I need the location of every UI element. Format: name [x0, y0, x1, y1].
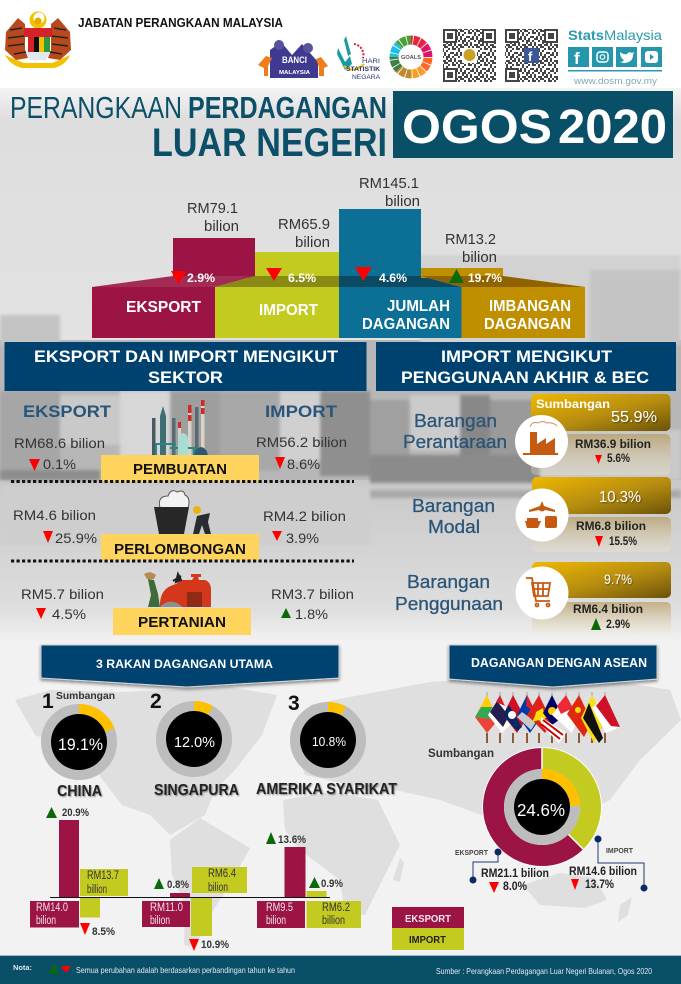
panel heading: PENGGUNAAN AKHIR & BEC: [401, 369, 649, 387]
callout: eksport: RM21.1 bilion: [481, 866, 549, 880]
donut chart: ASEAN share: [482, 747, 602, 867]
value: import pertanian: RM3.7 bilion: [271, 586, 354, 602]
header: department name: JABATAN PERANGKAAN MALAYSIA: [78, 15, 284, 30]
panel: 3 rakan dagangan utama: [30, 645, 464, 951]
donut chart: ASEAN share: 24.6%: [517, 800, 565, 820]
title: LUAR NEGERI: [152, 121, 387, 165]
value: eksport pertanian: 4.5%: [52, 606, 86, 622]
panel heading: [376, 342, 676, 391]
bars: Amerika Syarikat: 0.9%: [321, 878, 343, 890]
row: barangan perantaraan: RM36.9 bilion: [575, 437, 651, 451]
row: barangan penggunaan: Barangan: [407, 572, 490, 592]
row: barangan penggunaan: 2.9%: [606, 617, 630, 631]
title date box: [393, 91, 673, 158]
column: imbangan dagangan: IMBANGAN: [489, 298, 571, 315]
bars: Amerika Syarikat: 13.6%: [278, 834, 306, 846]
column: jumlah dagangan: [339, 176, 462, 338]
bars: China: bilion: [36, 915, 56, 927]
value: import pembuatan: 8.6%: [287, 456, 320, 472]
panel: import mengikut penggunaan akhir dan BEC: [376, 342, 676, 634]
row: barangan penggunaan: 9.7%: [604, 571, 632, 587]
QR code: Facebook: f: [528, 49, 533, 64]
legend: [392, 907, 464, 950]
icon: ASEAN flags: [475, 692, 620, 743]
logo: Banci Malaysia 2020: MALAYSIA: [279, 70, 310, 76]
icon: factory: [523, 422, 558, 455]
bars: Singapura: [142, 867, 247, 951]
bars: China: 20.9%: [62, 807, 89, 819]
bars: China: 8.5%: [92, 926, 115, 938]
StatsMalaysia social block: StatsMalaysia: [568, 27, 662, 43]
column: jumlah dagangan: bilion: [385, 194, 420, 210]
partner: China: [42, 690, 115, 800]
bar chart: eksport and import by partner: [30, 807, 361, 951]
panel: eksport dan import mengikut sektor: [4, 342, 366, 635]
logo: Banci Malaysia 2020: BANCI: [282, 55, 307, 65]
partner: Amerika Syarikat: [256, 692, 397, 798]
ribbon heading: [41, 645, 339, 687]
sector label: perlombongan: PERLOMBONGAN: [114, 542, 246, 558]
column: imbangan dagangan: [421, 232, 585, 338]
column: jumlah dagangan: JUMLAH: [387, 298, 450, 315]
row: barangan modal: Barangan: [412, 496, 495, 516]
bars: Singapura: bilion: [150, 915, 170, 927]
partner: China: 19.1%: [58, 736, 103, 754]
QR code: Facebook: [505, 29, 558, 82]
callout: import: [569, 836, 648, 892]
ribbon heading: [449, 645, 657, 687]
partner: Singapura: 12.0%: [174, 734, 215, 751]
bars: China: billion: [87, 884, 107, 896]
bars: Amerika Syarikat: bilion: [266, 915, 286, 927]
column: eksport: RM79.1: [187, 201, 238, 217]
title date box: 2020: [558, 101, 667, 154]
callout: import: RM14.6 bilion: [569, 864, 637, 878]
ribbon heading: DAGANGAN DENGAN ASEAN: [471, 656, 647, 670]
callout: import: 13.7%: [585, 877, 614, 891]
sector label: pertanian: PERTANIAN: [138, 615, 226, 631]
world map backdrop: [0, 640, 681, 956]
row: barangan penggunaan: Penggunaan: [395, 594, 503, 614]
value: import perlombongan: 3.9%: [286, 530, 319, 546]
bars: Singapura: 10.9%: [201, 939, 229, 951]
partner: Singapura: 2: [150, 690, 162, 713]
column: import: IMPORT: [259, 302, 319, 319]
panel heading: [4, 342, 366, 391]
sector label: pembuatan: [101, 455, 259, 482]
column: import: [215, 217, 339, 338]
StatsMalaysia social block: [568, 27, 662, 86]
title: PERANGKAAN: [10, 90, 182, 125]
title: [10, 90, 387, 165]
icon: plane, ship and truck: [525, 501, 557, 528]
logo: Sustainable Development Goals wheel: GOALS: [401, 55, 422, 61]
row: barangan modal: [412, 477, 671, 552]
QR code: website: [443, 29, 496, 82]
legend: IMPORT: [409, 934, 447, 946]
ribbon heading: 3 RAKAN DAGANGAN UTAMA: [96, 657, 273, 671]
bars: Amerika Syarikat: RM6.2: [322, 902, 350, 914]
column: jumlah dagangan: DAGANGAN: [362, 316, 450, 333]
column: imbangan dagangan: RM13.2: [445, 232, 496, 248]
StatsMalaysia social block: f: [574, 49, 580, 68]
bars: China: RM14.0: [36, 902, 68, 914]
value: eksport pembuatan: 0.1%: [43, 456, 76, 472]
icon: farmer and tractor: [144, 572, 211, 607]
value: import pembuatan: RM56.2 bilion: [256, 434, 347, 450]
bars: Singapura: RM11.0: [150, 902, 183, 914]
logo: Sustainable Development Goals wheel: [394, 40, 428, 74]
row: barangan modal: 10.3%: [599, 489, 641, 506]
column: import: bilion: [295, 235, 330, 251]
value: import perlombongan: [263, 508, 346, 546]
row: barangan perantaraan: 55.9%: [611, 409, 657, 426]
logo: Hari Statistik Negara: HARI: [362, 58, 380, 65]
column: imbangan dagangan: DAGANGAN: [484, 316, 571, 333]
value: eksport pertanian: [21, 586, 104, 622]
value: eksport pertanian: RM5.7 bilion: [21, 586, 104, 602]
row: barangan perantaraan: Sumbangan: [536, 399, 610, 411]
value: import perlombongan: RM4.2 bilion: [263, 508, 346, 524]
row: barangan penggunaan: [395, 562, 671, 634]
column: jumlah dagangan: RM145.1: [359, 176, 419, 192]
value: eksport perlombongan: RM4.6 bilion: [13, 507, 96, 523]
column heading: eksport: EKSPORT: [23, 402, 112, 421]
sector label: pembuatan: PEMBUATAN: [133, 462, 227, 478]
bars: Singapura: RM6.4: [208, 868, 236, 880]
column: imbangan dagangan: 19.7%: [468, 271, 502, 285]
partner: Amerika Syarikat: 10.8%: [312, 735, 346, 749]
value: eksport pembuatan: RM68.6 bilion: [14, 435, 105, 451]
partner: Amerika Syarikat: 3: [288, 692, 300, 715]
icon: shopping cart: [526, 578, 550, 606]
value: eksport perlombongan: 25.9%: [55, 530, 97, 546]
bars: Singapura: bilion: [208, 882, 228, 894]
partner: Singapura: SINGAPURA: [154, 782, 239, 799]
callout: eksport: [455, 848, 549, 893]
StatsMalaysia social block: www.dosm.gov.my: [573, 76, 658, 86]
icon: refinery: [152, 400, 208, 456]
bars: Singapura: 0.8%: [167, 879, 189, 891]
callout: import: IMPORT: [606, 848, 634, 855]
note: Nota:: [13, 963, 32, 972]
sector label: perlombongan: [101, 534, 259, 560]
icon: down arrow: [61, 966, 71, 973]
panel: dagangan dengan ASEAN: [428, 645, 657, 893]
column: imbangan dagangan: bilion: [462, 250, 497, 266]
partner: Amerika Syarikat: AMERIKA SYARIKAT: [256, 781, 397, 798]
footer: [0, 955, 681, 984]
value: import pertanian: 1.8%: [295, 606, 328, 622]
label: sumbangan: Sumbangan: [428, 748, 494, 760]
value: import pembuatan: [256, 434, 347, 472]
column: eksport: bilion: [204, 219, 239, 235]
bars: China: [30, 807, 128, 938]
value: import pertanian: [271, 586, 354, 622]
partner: China: Sumbangan: [56, 691, 115, 702]
row: barangan perantaraan: Perantaraan: [403, 432, 507, 452]
column: eksport: 2.9%: [187, 271, 215, 285]
column: eksport: EKSPORT: [126, 299, 202, 316]
legend: EKSPORT: [405, 913, 452, 925]
icon: mine cart and worker: [154, 491, 211, 534]
row: barangan perantaraan: 5.6%: [607, 451, 630, 465]
panel heading: IMPORT MENGIKUT: [441, 348, 612, 366]
partner: China: 1: [42, 690, 54, 713]
sector label: pertanian: [113, 608, 251, 635]
logo: Hari Statistik Negara: NEGARA: [352, 74, 381, 81]
column: eksport: [92, 201, 255, 338]
row: barangan modal: Modal: [428, 517, 480, 537]
header: crest of Malaysia: [5, 12, 71, 68]
callout: eksport: 8.0%: [503, 879, 527, 893]
value: eksport pembuatan: [14, 435, 105, 472]
icon: up arrow: [49, 963, 59, 974]
callout: eksport: EKSPORT: [455, 850, 489, 857]
column heading: import: IMPORT: [265, 402, 338, 421]
panel heading: EKSPORT DAN IMPORT MENGIKUT: [34, 348, 338, 366]
partner: China: CHINA: [57, 783, 102, 800]
bars: Amerika Syarikat: billion: [322, 915, 345, 927]
bars: China: RM13.7: [87, 870, 119, 882]
row: barangan penggunaan: RM6.4 bilion: [573, 602, 643, 616]
partner: Singapura: [150, 690, 239, 799]
logo: Hari Statistik Negara: [337, 36, 381, 81]
row: barangan perantaraan: Barangan: [414, 411, 497, 431]
panel heading: SEKTOR: [148, 369, 223, 387]
bars: Amerika Syarikat: [257, 832, 361, 928]
row: barangan modal: 15.5%: [609, 534, 637, 548]
logo: Banci Malaysia 2020: [258, 40, 328, 78]
logo: Hari Statistik Negara: STATISTIK: [346, 66, 380, 73]
note text: Semua perubahan adalah berdasarkan perbandingan tahun ke tahun: [76, 965, 295, 975]
row: barangan perantaraan: [403, 394, 670, 475]
bars: Amerika Syarikat: RM9.5: [266, 902, 293, 914]
row: barangan modal: RM6.8 bilion: [576, 519, 646, 533]
value: eksport perlombongan: [13, 507, 97, 546]
column: import: 6.5%: [288, 271, 316, 285]
title: PERDAGANGAN: [188, 90, 387, 125]
column: import: RM65.9: [278, 217, 330, 233]
column: jumlah dagangan: 4.6%: [379, 271, 407, 285]
headline chart: trade totals: [92, 176, 585, 338]
background photo: container port: [0, 88, 681, 642]
title date box: OGOS: [402, 101, 552, 154]
